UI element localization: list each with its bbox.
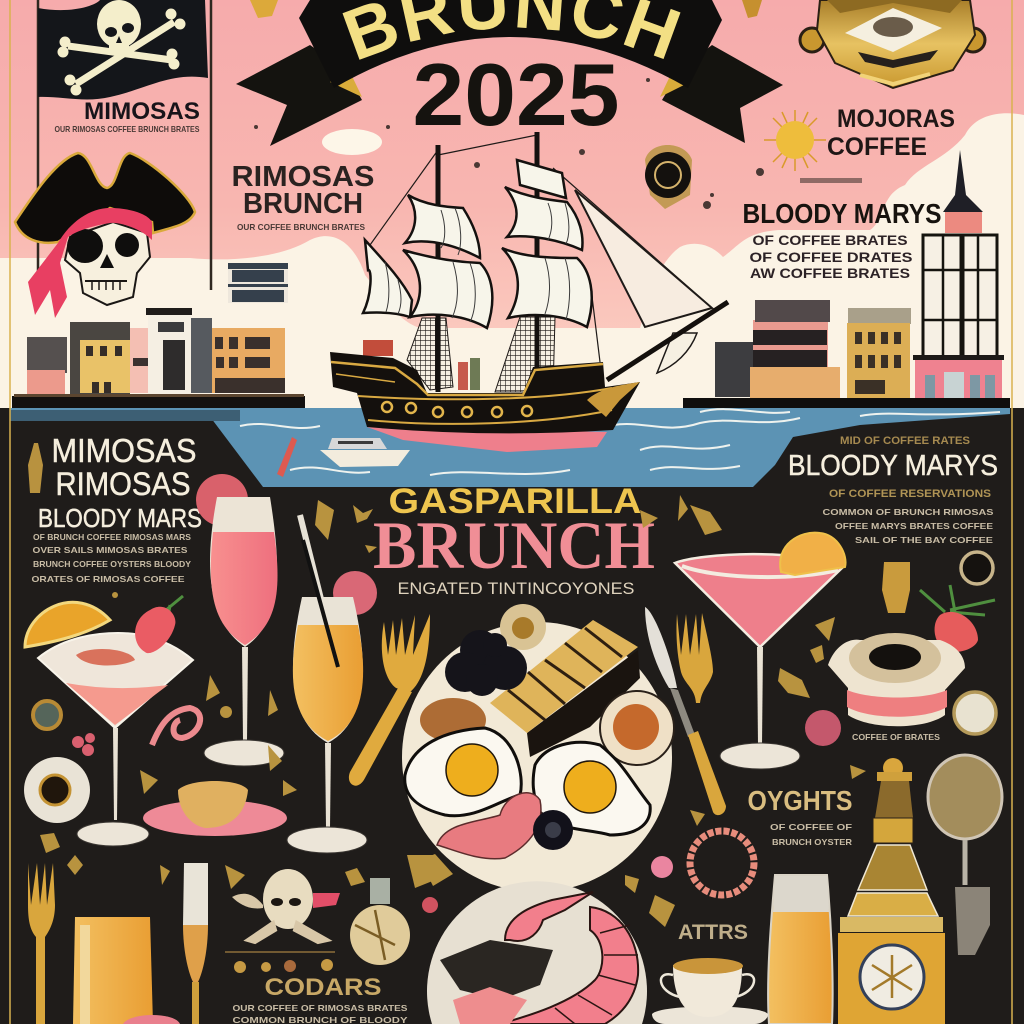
straw (300, 515, 338, 667)
year 2025: 2025 (412, 45, 620, 144)
toast (490, 620, 640, 757)
gold clock tower bottle (838, 758, 945, 1024)
shrimp body (500, 907, 638, 1024)
fork right (676, 613, 713, 703)
white building (146, 308, 192, 394)
rope ladders (407, 317, 555, 392)
pink curl left (152, 708, 200, 745)
figurehead (587, 382, 640, 417)
blackberries (445, 630, 527, 696)
crossbones (58, 9, 185, 95)
subheading: ENGATED TINTINCOYONES (398, 580, 634, 598)
pirate skull bottom (232, 869, 340, 942)
small text under oyghts: OF COFFEE OF (770, 822, 852, 832)
bowl (828, 633, 965, 726)
pink building (130, 328, 155, 393)
flag frame poles (38, 0, 211, 290)
sail seams (385, 203, 570, 322)
shrimp segments (555, 925, 638, 1024)
coffee cup (652, 958, 768, 1024)
left dock (12, 394, 305, 411)
scattered gold ornaments (40, 495, 866, 927)
orange building (212, 328, 285, 393)
label: mimosas: MIMOSAS (84, 98, 200, 125)
sun icon (764, 110, 826, 171)
pink ball bottom (422, 897, 438, 913)
label: bloody marys: BLOODY MARYS (742, 198, 942, 229)
plate (402, 622, 672, 892)
right small text: OF COFFEE RESERVATIONS (829, 488, 991, 500)
small cloud (322, 129, 382, 155)
nose (100, 254, 114, 268)
side text: mimosas stack: BLOODY MARS (38, 503, 202, 533)
label: mojoras coffee (827, 105, 955, 161)
right champagne glass (768, 875, 833, 1024)
speedboat (320, 438, 410, 467)
perfume bottle (350, 878, 410, 965)
bottom left fork (28, 863, 55, 1024)
pink flute (204, 497, 284, 766)
heading: gasparilla: GASPARILLA (388, 482, 642, 521)
shrimp plate (427, 881, 647, 1024)
pink flowers (72, 733, 95, 756)
top gold doodle left (250, 0, 278, 18)
coffee small lines: OF COFFEE BRATES (752, 232, 908, 248)
ring ornament (961, 552, 993, 584)
left small text: OVER SAILS MIMOSAS BRATES (32, 545, 188, 555)
stern flags (363, 340, 393, 356)
left harbor buildings (27, 263, 288, 394)
orange slice left (25, 602, 110, 647)
jib sail (575, 190, 712, 327)
small grey building (715, 342, 753, 397)
gold ring left (33, 701, 61, 729)
cream clouds and horizon (0, 113, 1024, 408)
coffee small lines: AW COFFEE BRATES (750, 265, 910, 281)
right small text: SAIL OF THE BAY COFFEE (855, 535, 993, 545)
right small text: COMMON OF BRUNCH RIMOSAS (822, 507, 994, 517)
bowsprit (607, 302, 728, 380)
right small text (822, 488, 994, 545)
mushroom (420, 698, 486, 742)
fried eggs (405, 728, 650, 835)
gun ports (382, 402, 532, 417)
label: bloody marys right: BLOODY MARYS (788, 450, 998, 482)
left small text: BRUNCH COFFEE OYSTERS BLOODY (33, 559, 191, 569)
strawberry right (920, 585, 995, 652)
pirate ship (330, 132, 728, 433)
coffee small lines: OF COFFEE DRATES (750, 249, 912, 265)
pink bead (651, 856, 673, 878)
ribbon folds (330, 72, 690, 97)
pirate flag (38, 0, 208, 99)
sails (363, 160, 592, 328)
hull trim (331, 362, 612, 424)
bacon and olives (437, 793, 573, 859)
top gold doodle right (742, 0, 762, 18)
eyeball left (24, 757, 90, 823)
pink base (27, 370, 65, 394)
small text under oyghts: BRUNCH OYSTER (772, 837, 852, 847)
emblem ornament (645, 145, 692, 209)
small text under rimosas: OUR COFFEE BRUNCH BRATES (237, 222, 365, 232)
martini right (675, 554, 843, 769)
teeth (85, 281, 127, 290)
side knobs (800, 28, 985, 52)
pink button (805, 710, 841, 746)
flag skull (97, 0, 141, 53)
shrimp tail (453, 987, 527, 1024)
label: rimosas brunch: BRUNCH (243, 188, 363, 220)
martini left (38, 633, 193, 846)
pink sign building (750, 300, 840, 398)
left small text: ORATES OF RIMOSAS COFFEE (32, 574, 185, 584)
right harbor buildings (715, 300, 911, 398)
pink ball behind glass (333, 571, 377, 615)
small text under codars: OUR COFFEE OF RIMOSAS BRATES (232, 1003, 408, 1013)
gold line with charms (225, 952, 335, 973)
gold bottle small (882, 562, 910, 613)
beer glass (73, 917, 153, 1024)
left small text (32, 532, 191, 584)
skull (65, 222, 150, 305)
narrow flute bottom left (183, 863, 208, 1024)
small text under oyghts (770, 822, 852, 847)
shrimp head (505, 892, 593, 941)
right eye (115, 233, 139, 257)
eyepatch (67, 229, 103, 263)
pirate skull with hat (15, 153, 195, 318)
hat (15, 153, 195, 243)
dish left (143, 781, 287, 836)
ribbon band (299, 0, 722, 88)
label: rimosas brunch: RIMOSAS (232, 161, 374, 193)
pink ship reflection (367, 427, 607, 452)
side text: mimosas stack (38, 432, 202, 533)
sky background (0, 0, 1024, 340)
label: rimosas brunch (232, 161, 374, 220)
lower jib (657, 333, 697, 373)
label: codars: CODARS (264, 974, 382, 1001)
hull (330, 352, 640, 433)
fork left of plate (349, 614, 430, 786)
yellow building (70, 322, 130, 394)
ring right (954, 692, 996, 734)
left small text: OF BRUNCH COFFEE RIMOSAS MARS (33, 532, 191, 542)
small text under mimosas: OUR RIMOSAS COFFEE BRUNCH BRATES (54, 124, 200, 134)
small text under codars (232, 1003, 408, 1024)
label: mojoras coffee: MOJORAS (837, 105, 955, 133)
bead ring (690, 831, 754, 895)
striped building (228, 263, 288, 303)
wave lines (240, 409, 1000, 475)
pink ball behind flute (196, 474, 248, 526)
red flare (277, 437, 297, 477)
bandana (28, 208, 152, 318)
side text: mimosas stack: MIMOSAS (52, 432, 196, 469)
label: mojoras coffee: COFFEE (827, 133, 927, 161)
orange slice right (780, 533, 846, 575)
rigging (370, 135, 712, 362)
lighthouse tower (913, 150, 1004, 398)
gold text above bloody marys: MID OF COFFEE RATES (840, 435, 970, 447)
sauce (440, 940, 553, 1000)
orange flute (287, 540, 367, 853)
banner ribbon (236, 0, 783, 146)
text under bowl: COFFEE OF BRATES (852, 732, 940, 742)
masts (438, 132, 537, 392)
small sky doodles (254, 78, 862, 209)
right dock (683, 398, 1010, 411)
label: oyghts: OYGHTS (748, 785, 852, 816)
right small text: OFFEE MARYS BRATES COFFEE (835, 521, 993, 531)
side text: mimosas stack: RIMOSAS (56, 466, 190, 502)
knife (645, 607, 726, 815)
sliced egg (600, 691, 674, 765)
left gold ornament (28, 443, 43, 493)
water (10, 408, 1010, 487)
grey building (27, 337, 67, 373)
spoon glass (928, 755, 1002, 955)
heading: brunch: BRUNCH (373, 507, 655, 583)
ribbon tails (236, 45, 783, 146)
deck figures (458, 358, 480, 390)
pink item bottom (123, 1015, 180, 1024)
strawberry left (135, 596, 183, 653)
label: attrs: ATTRS (678, 921, 748, 944)
dark building (191, 318, 212, 393)
gold mask ornament (800, 0, 985, 88)
small gold ball (500, 604, 546, 650)
coffee small lines (750, 232, 912, 281)
yellow building (847, 308, 911, 398)
